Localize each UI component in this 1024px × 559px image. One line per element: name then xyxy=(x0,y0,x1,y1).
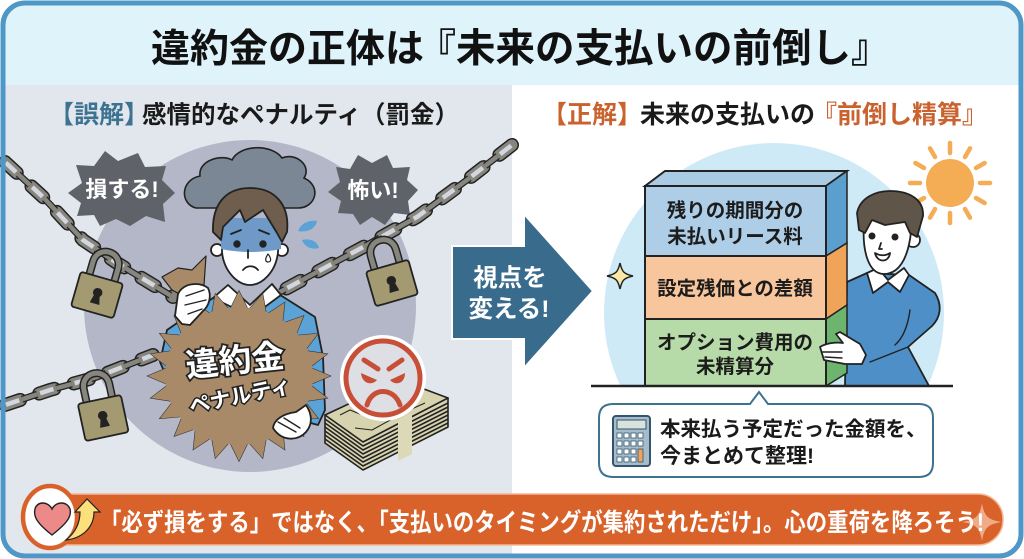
heading: correct view: 【正解】 xyxy=(542,101,642,129)
callout xyxy=(599,392,933,477)
icon: sun xyxy=(910,143,990,223)
title: 未来の支払いの前倒し xyxy=(456,27,851,71)
block layer: option costs xyxy=(645,319,826,386)
icon: angry face xyxy=(340,335,426,421)
burst: penalty: 違約金 xyxy=(184,337,286,384)
block layer: residual difference xyxy=(645,256,826,319)
heading: misconception: 【誤解】 xyxy=(49,101,149,129)
panel: correct view xyxy=(542,101,990,483)
icon: heart badge xyxy=(23,486,100,548)
icon: money stack xyxy=(325,380,448,470)
icon: banner sparkle xyxy=(962,503,1002,541)
man's hand xyxy=(820,332,866,364)
burst: penalty: ペナルティ xyxy=(187,374,293,419)
burst: penalty xyxy=(147,290,331,462)
icon: sparkle xyxy=(607,263,633,289)
title: 違約金の正体は xyxy=(151,28,424,71)
arrow: change viewpoint: 変える! xyxy=(469,295,549,323)
block layer: option costs: オプション費用の xyxy=(657,332,813,354)
hands xyxy=(175,284,311,439)
ground line xyxy=(591,385,953,387)
speech burst: fear xyxy=(328,155,418,225)
chains xyxy=(5,145,512,405)
block layer: remaining lease xyxy=(645,186,826,256)
bottom banner xyxy=(23,486,1003,548)
stacked block xyxy=(645,171,847,386)
speech burst: loss xyxy=(68,151,175,226)
title: 』 xyxy=(851,28,890,71)
heading: correct view: 『前倒し精算』 xyxy=(812,101,987,129)
panel: misconception xyxy=(5,101,512,472)
gray circle backdrop xyxy=(84,140,416,472)
light blue circle backdrop xyxy=(604,143,944,385)
worried man xyxy=(160,188,325,425)
title: 『 xyxy=(417,28,456,71)
heading: misconception: 感情的なペナルティ xyxy=(142,101,361,129)
icon: storm cloud xyxy=(184,148,315,208)
padlocks xyxy=(71,234,418,441)
heading: misconception: （罰金） xyxy=(361,101,459,129)
block layer: remaining lease: 未払いリース料 xyxy=(667,226,803,248)
callout: 本来払う予定だった金額を、 xyxy=(660,418,926,441)
speech burst: fear: 怖い! xyxy=(347,178,399,203)
arrow: change viewpoint: 視点を xyxy=(473,264,547,292)
block layer: residual difference: 設定残価との差額 xyxy=(657,277,813,300)
heading: correct view: 未来の支払いの xyxy=(640,101,815,129)
icon: calculator xyxy=(613,416,650,466)
speech burst: loss: 損する! xyxy=(85,177,159,202)
callout: 今まとめて整理! xyxy=(660,445,814,468)
block layer: option costs: 未精算分 xyxy=(696,355,774,378)
happy man xyxy=(845,191,940,386)
arrow: change viewpoint xyxy=(452,214,593,368)
block layer: remaining lease: 残りの期間分の xyxy=(667,199,803,222)
